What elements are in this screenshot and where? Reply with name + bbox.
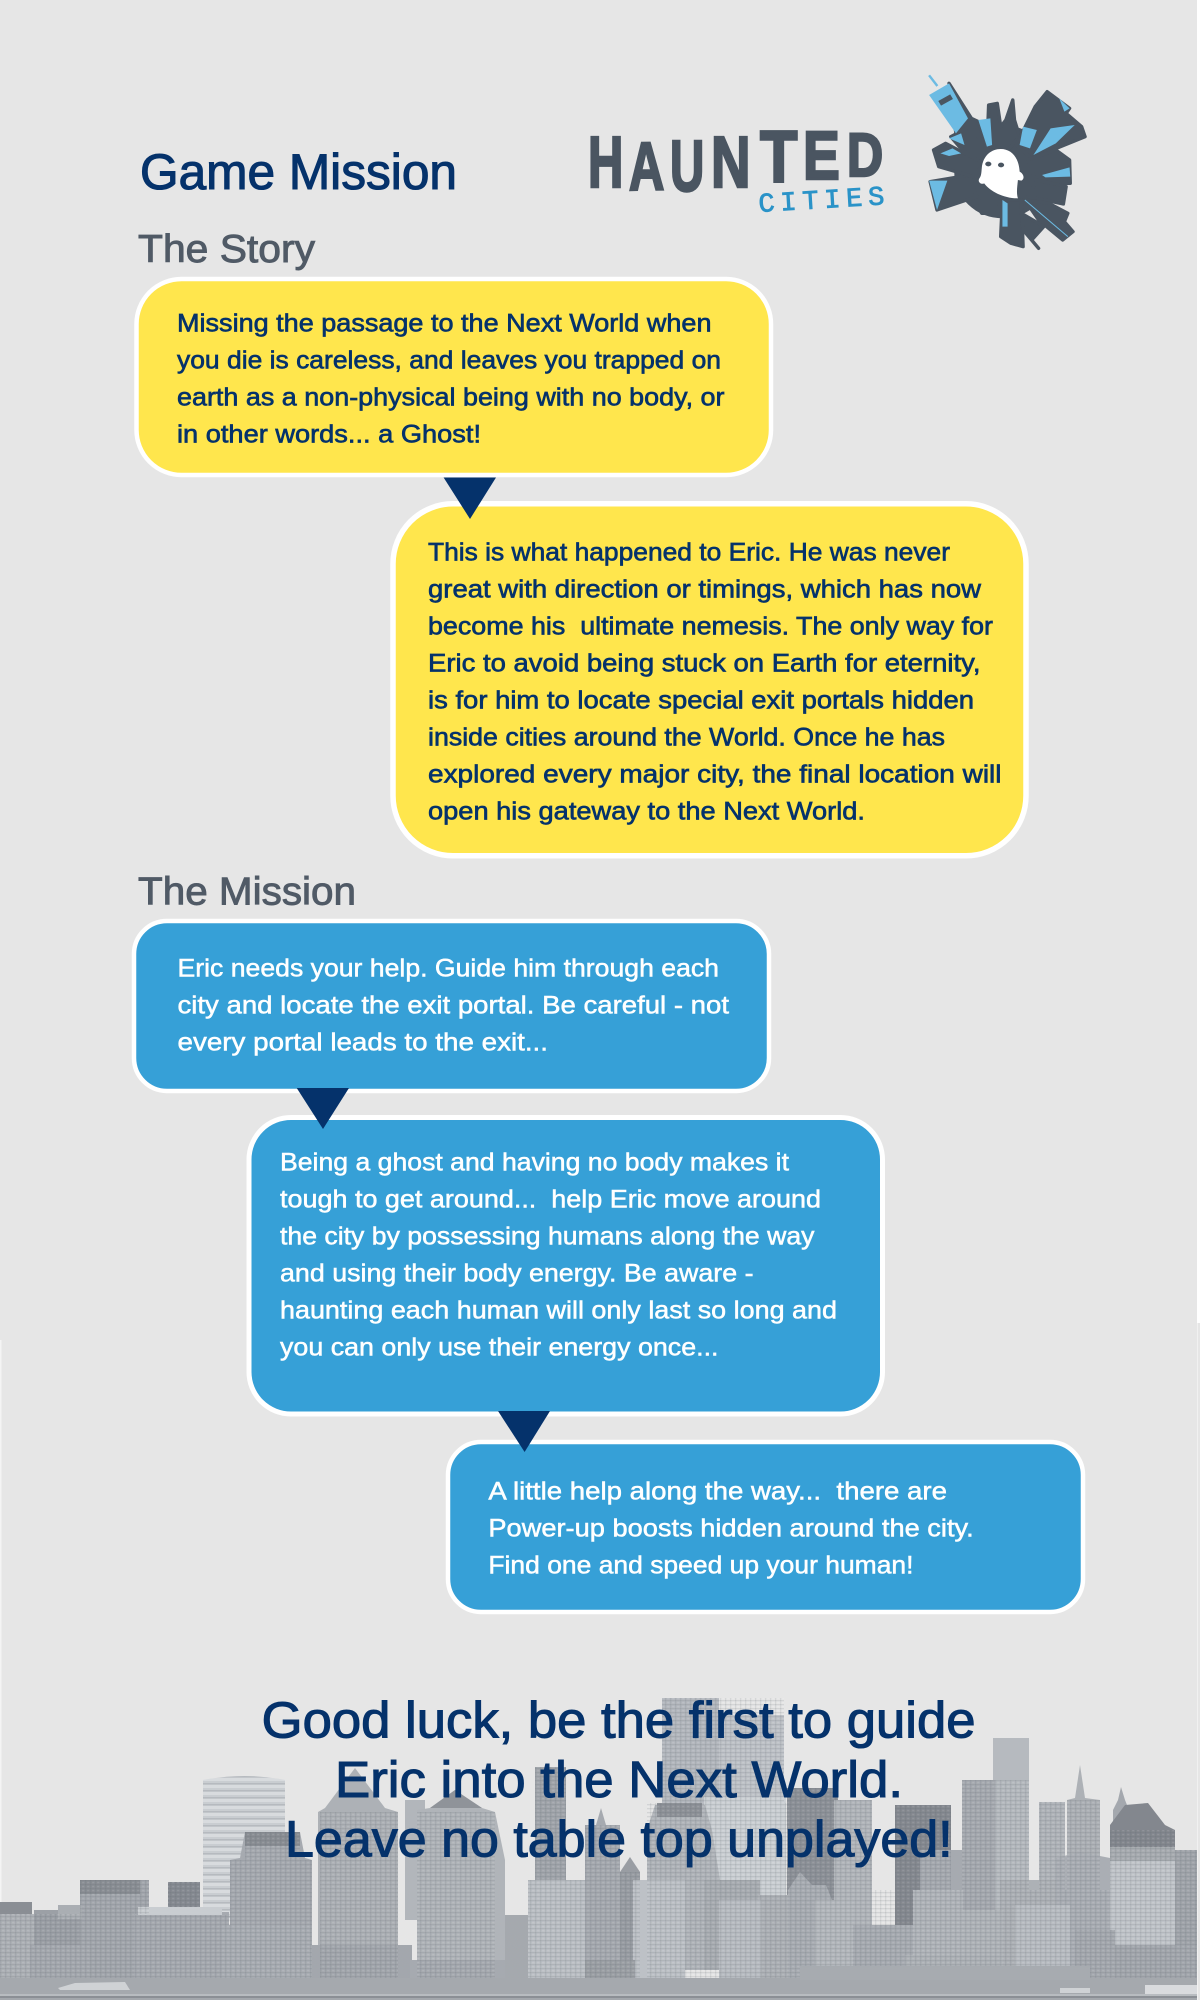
cities letters: CITIES (758, 183, 885, 221)
panel: story bubble 2: explored every major city, the final location will (428, 761, 1002, 789)
panel: story bubble 1: Missing the passage to the Next World when (177, 310, 712, 338)
haunted letters: E (803, 117, 840, 194)
panel: mission bubble 1: Eric needs your help. Guide him through each (178, 954, 719, 982)
city core (954, 125, 1051, 218)
panel: story bubble 2: Eric to avoid being stuck on Earth for eternity, (428, 650, 980, 678)
panel: mission bubble 3: Find one and speed up your human! (488, 1551, 914, 1579)
panel: mission bubble 2: haunting each human will only last so long and (280, 1297, 837, 1325)
panel: mission bubble 2: tough to get around... help Eric move around (280, 1186, 821, 1214)
panel: story bubble 2 (393, 504, 1026, 856)
panel: mission bubble 2 (249, 1118, 882, 1414)
ghost (979, 149, 1024, 198)
panel: story bubble 1 (136, 279, 771, 475)
panel: mission bubble 2: the city by possessing humans along the way (280, 1223, 815, 1251)
panel: story bubble 2: become his ultimate nemesis. The only way for (428, 613, 993, 641)
closing message: Eric into the Next World. (335, 1751, 903, 1808)
panel: story bubble 2: is for him to locate special exit portals hidden (428, 687, 974, 715)
arrow: mission bubble 2 to 3 (498, 1411, 550, 1452)
blue highlights (929, 83, 1075, 227)
antenna and window details (929, 75, 1068, 237)
window texture (0, 1698, 1197, 1985)
round glass tower (203, 1776, 290, 1920)
arrow: story bubble 1 to 2 (444, 478, 496, 519)
panel: mission bubble 2: and using their body energy. Be aware - (280, 1260, 754, 1288)
haunted letters: T (760, 117, 797, 198)
panel: mission bubble 1: city and locate the exit portal. Be careful - not (178, 991, 729, 1019)
heading: The Story: The Story (138, 228, 316, 271)
closing message: Leave no table top unplayed! (285, 1811, 953, 1868)
arrow: mission bubble 1 to 2 (297, 1088, 349, 1129)
panel: mission bubble 3 (448, 1442, 1083, 1612)
haunted letters: A (628, 127, 665, 205)
panel: mission bubble 3: A little help along the way... there are (488, 1477, 947, 1505)
panel: mission bubble 3: Power-up boosts hidden around the city. (488, 1514, 974, 1542)
panel: story bubble 2: inside cities around the World. Once he has (428, 724, 945, 752)
haunted letters: H (588, 123, 623, 203)
panel: mission bubble 1 (134, 921, 769, 1091)
haunted letters: U (670, 126, 704, 206)
far towers (405, 1698, 1175, 1978)
haunted letters: N (711, 122, 751, 203)
panel: story bubble 1: earth as a non-physical being with no body, or (177, 384, 724, 412)
heading: The Mission: The Mission (138, 870, 356, 913)
low left blocks (0, 1880, 530, 1985)
panel: mission bubble 1: every portal leads to the exit... (178, 1028, 548, 1056)
panel: story bubble 2: This is what happened to Eric. He was never (428, 539, 950, 567)
closing message: Good luck, be the first to guide (262, 1691, 975, 1748)
title: Game Mission (140, 144, 457, 200)
panel: story bubble 1: in other words... a Ghost! (177, 420, 481, 448)
middle towers (230, 1768, 1197, 1980)
radial buildings (930, 83, 1085, 248)
closing message (262, 1691, 975, 1868)
panel: story bubble 2: open his gateway to the Next World. (428, 798, 865, 826)
logo icon: radial city with ghost (929, 75, 1085, 248)
city skyline illustration (0, 1698, 1197, 2000)
panel: story bubble 2: great with direction or timings, which has now (428, 576, 982, 604)
haunted letters: D (847, 121, 883, 189)
logo wordmark: Haunted Cities (588, 117, 885, 221)
haunted letters (588, 117, 883, 206)
front towers (505, 1872, 1197, 1985)
panel: story bubble 1: you die is careless, and leaves you trapped on (177, 346, 721, 374)
panel: mission bubble 2: Being a ghost and having no body makes it (280, 1149, 789, 1177)
panel: mission bubble 2: you can only use their energy once... (280, 1334, 718, 1362)
waterfront trees and shore (0, 1966, 1197, 2000)
